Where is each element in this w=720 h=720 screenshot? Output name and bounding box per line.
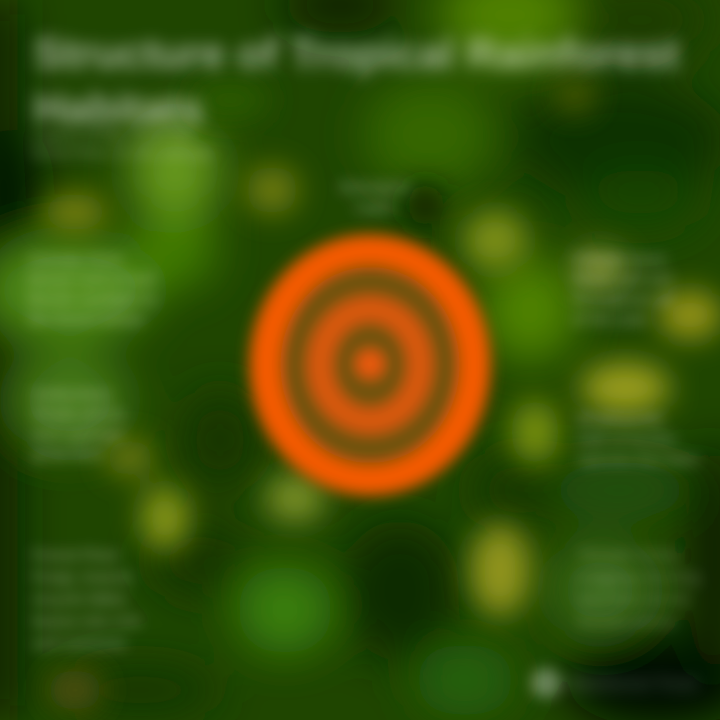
text block: forest floor, lower left: recycle fallen <box>32 591 127 608</box>
text block: canopy, left: Dense roof of leaf <box>28 271 155 288</box>
text block: climate, right: of the year <box>572 311 648 328</box>
subtitle: Layers of life, from the <box>32 128 193 145</box>
text block: biodiversity, right: Half of known <box>578 431 676 448</box>
text block: biodiversity, right: Biodiversity <box>578 411 664 428</box>
text block: forest floor, lower left: soil nutrients <box>32 635 126 652</box>
text block: canopy, left <box>24 250 158 330</box>
text block: understory, left: Shade plants <box>32 406 125 423</box>
footer text: Rainforest Trust <box>567 674 697 693</box>
text block: forest floor, lower left: Forest Floor <box>32 547 120 564</box>
text block: threats, lower right: Threats Today <box>578 547 679 564</box>
text block: understory, left: grow here <box>32 446 104 463</box>
center dot <box>356 350 384 378</box>
heading: top label: Emergent <box>340 179 410 196</box>
text block: forest floor, lower left <box>28 544 144 654</box>
text block: climate, right: Warm and wet <box>572 271 673 288</box>
heading: top label: Layer <box>355 199 395 216</box>
text block: threats, lower right: and fires shrink <box>578 591 690 608</box>
text block: canopy, left: Canopy Zone <box>28 251 123 268</box>
title: Habitats <box>34 85 204 133</box>
text block: forest floor, lower left: leaves into rich <box>32 613 141 630</box>
heading: top label <box>336 176 413 220</box>
text block: climate, right <box>568 248 676 331</box>
text block: threats, lower right: forests yearly <box>578 613 676 630</box>
title <box>25 28 687 134</box>
text block: understory, left: Understory <box>32 386 112 403</box>
outer ring <box>265 250 475 480</box>
text block: biodiversity, right <box>574 408 700 471</box>
text block: canopy, left: the forest below <box>28 311 143 328</box>
text block: understory, left: and saplings <box>32 426 124 443</box>
text block: biodiversity, right: species live here <box>578 451 698 468</box>
text block: canopy, left: blocks sunlight to <box>28 291 156 308</box>
footer: logo mark and source <box>524 660 697 706</box>
title: Structure of Tropical Rainforest <box>34 30 679 78</box>
text block: climate, right: throughout all <box>572 291 673 308</box>
text block: forest floor, lower left: Fungi, insects <box>32 569 133 586</box>
text block: climate, right: Climate Zone <box>572 251 666 268</box>
subtitle <box>30 127 213 164</box>
icon: logo circle <box>531 668 561 698</box>
text block: threats, lower right: Logging, farming <box>578 569 700 586</box>
subtitle: forest floor to the canopy <box>32 145 213 162</box>
text block: threats, lower right <box>578 546 702 630</box>
middle ring <box>320 309 420 421</box>
inner band: dark olive fill between rings <box>280 267 460 463</box>
text block: understory, left <box>28 384 127 466</box>
